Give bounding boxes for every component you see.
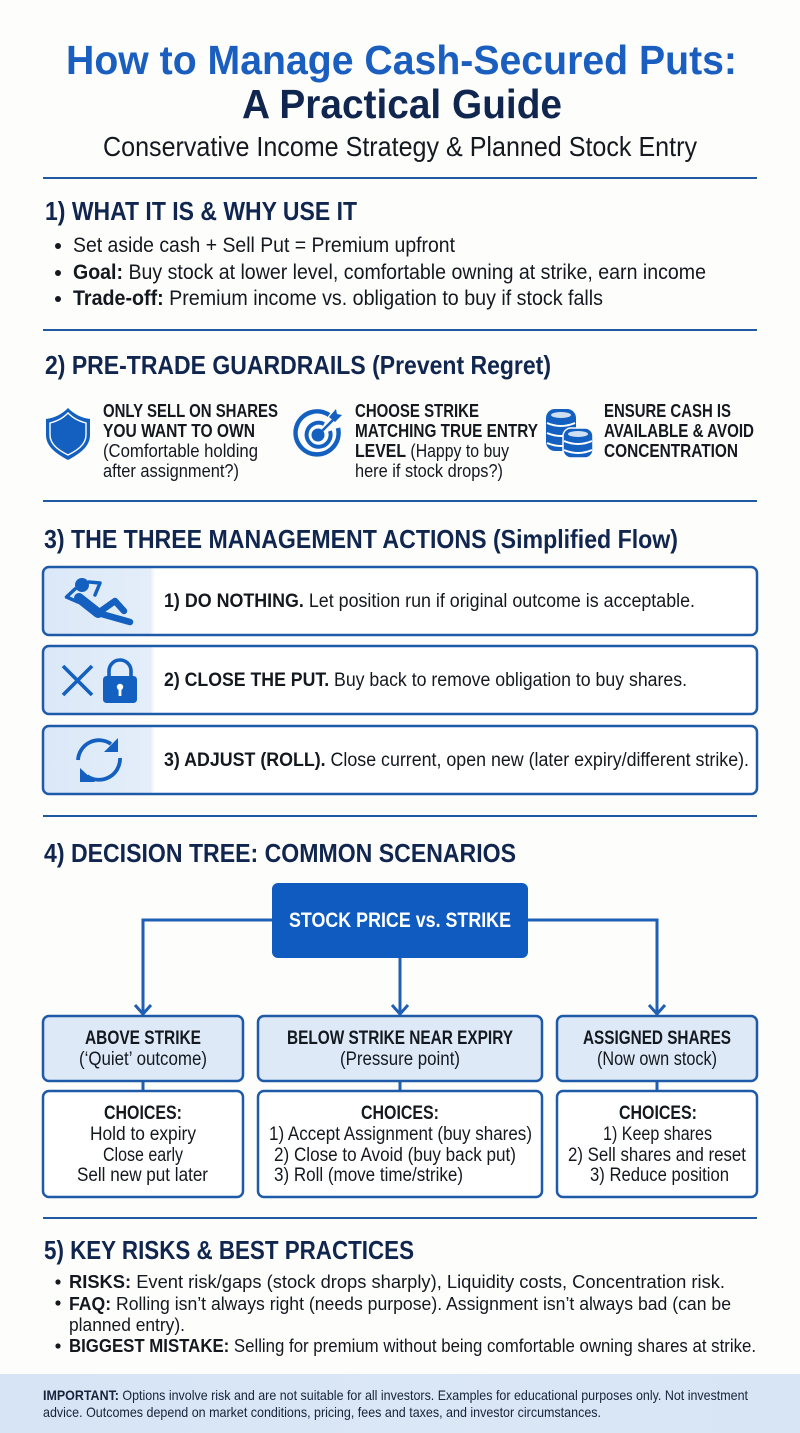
root node: stock price vs strike	[272, 883, 528, 958]
scenario: below strike near expiry: (Pressure point)	[340, 1049, 460, 1070]
panel: section 5 risks	[44, 1235, 756, 1356]
choices: below strike: CHOICES:	[361, 1103, 439, 1124]
guardrail text: cash and concentration	[604, 401, 754, 461]
choices: above strike: CHOICES:	[104, 1103, 182, 1124]
choices: assigned shares	[557, 1091, 757, 1197]
panel: section 1 what it is	[45, 196, 706, 310]
bullet list: section 5: BIGGEST MISTAKE: Selling for premium without being comfortable owning shares at strike.	[69, 1335, 756, 1356]
action text: close the put: 2) CLOSE THE PUT. Buy back to remove obligation to buy shares.	[164, 670, 687, 691]
panel: section 4 decision tree	[43, 838, 757, 1197]
guardrail text: shares you want to own: ONLY SELL ON SHARES	[103, 401, 278, 421]
action text: do nothing: 1) DO NOTHING. Let position run if original outcome is acceptable.	[164, 591, 695, 612]
choices: above strike: Close early	[103, 1145, 183, 1166]
panel: section 3 management actions	[43, 524, 757, 794]
choices: below strike: 2) Close to Avoid (buy back put)	[274, 1145, 516, 1166]
choices: assigned shares: 3) Reduce position	[590, 1165, 729, 1186]
scenario: above strike: (‘Quiet’ outcome)	[79, 1049, 207, 1070]
scenario: below strike near expiry	[258, 1016, 542, 1081]
scenario: assigned shares: (Now own stock)	[597, 1049, 717, 1070]
panel: section 2 guardrails	[45, 350, 754, 481]
heading: section 2: 2) PRE-TRADE GUARDRAILS (Prevent Regret)	[45, 350, 551, 380]
icon: reclining person	[66, 578, 130, 622]
guardrail text: shares you want to own: (Comfortable holding	[103, 441, 258, 461]
scenario: below strike near expiry: BELOW STRIKE NEAR EXPIRY	[287, 1028, 513, 1049]
heading: section 3: 3) THE THREE MANAGEMENT ACTIONS (Simplified Flow)	[44, 524, 678, 554]
bullet list: section 1: Trade-off: Premium income vs. obligation to buy if stock falls	[73, 287, 603, 310]
heading: section 4: 4) DECISION TREE: COMMON SCENARIOS	[44, 838, 516, 868]
guardrail text: cash and concentration: AVAILABLE & AVOID	[604, 421, 754, 441]
bullet list: section 1: Goal: Buy stock at lower level, comfortable owning at strike, earn income	[73, 261, 706, 284]
icon: X and padlock	[63, 660, 137, 703]
choices: above strike	[43, 1091, 243, 1197]
guardrail text: cash and concentration: ENSURE CASH IS	[604, 401, 731, 421]
icon: shield	[46, 408, 90, 460]
choices: above strike: Sell new put later	[77, 1165, 209, 1186]
icon: coin stacks	[546, 409, 593, 458]
icon: target	[296, 409, 342, 454]
scenario: above strike	[43, 1016, 243, 1081]
guardrail text: shares you want to own: YOU WANT TO OWN	[103, 421, 255, 441]
title: A Practical Guide	[242, 81, 562, 127]
choices: assigned shares: 1) Keep shares	[603, 1124, 712, 1145]
guardrail text: matching strike: CHOOSE STRIKE	[355, 401, 479, 421]
choices: assigned shares: CHOICES:	[619, 1103, 697, 1124]
scenario: above strike: ABOVE STRIKE	[85, 1028, 201, 1049]
arrow: to assigned shares	[528, 920, 665, 1014]
action text: adjust roll: 3) ADJUST (ROLL). Close current, open new (later expiry/different strike).	[164, 750, 749, 771]
arrow: to above strike	[135, 920, 272, 1014]
bullet list: section 5: planned entry).	[69, 1314, 185, 1335]
choices: assigned shares: 2) Sell shares and reset	[568, 1145, 747, 1166]
bullet list: section 1: Set aside cash + Sell Put = Premium upfront	[73, 234, 455, 257]
guardrail text: matching strike: LEVEL (Happy to buy	[355, 441, 509, 461]
scenario: assigned shares: ASSIGNED SHARES	[583, 1028, 731, 1049]
subtitle: Conservative Income Strategy & Planned Stock Entry	[103, 131, 697, 162]
guardrail text: matching strike: MATCHING TRUE ENTRY	[355, 421, 538, 441]
scenario: assigned shares	[557, 1016, 757, 1081]
root node: stock price vs strike: STOCK PRICE vs. STRIKE	[289, 909, 511, 932]
bullet list: section 1	[55, 234, 706, 310]
guardrail text: matching strike: here if stock drops?)	[355, 461, 503, 481]
choices: below strike: 3) Roll (move time/strike)	[274, 1165, 463, 1186]
heading: section 5: 5) KEY RISKS & BEST PRACTICES	[44, 1235, 414, 1265]
bullet list: section 5	[55, 1271, 756, 1356]
guardrail text: shares you want to own	[103, 401, 278, 481]
action row: close the put	[43, 646, 757, 714]
guardrail text: matching strike	[355, 401, 538, 481]
icon: roll arrows	[78, 738, 120, 782]
footer disclaimer	[0, 1374, 800, 1433]
choices: below strike: 1) Accept Assignment (buy shares)	[269, 1124, 532, 1145]
footer disclaimer: advice. Outcomes depend on market conditions, pricing, fees and taxes, and investor circumstances.	[43, 1404, 601, 1420]
guardrail text: cash and concentration: CONCENTRATION	[604, 441, 738, 461]
bullet list: section 5: RISKS: Event risk/gaps (stock drops sharply), Liquidity costs, Concentration risk.	[69, 1271, 725, 1292]
choices: above strike: Hold to expiry	[90, 1124, 196, 1145]
arrow: to below strike	[392, 958, 408, 1014]
action row: do nothing	[43, 567, 757, 635]
choices: below strike	[258, 1091, 542, 1197]
title: How to Manage Cash-Secured Puts:	[66, 37, 737, 83]
bullet list: section 5: FAQ: Rolling isn’t always right (needs purpose). Assignment isn’t always bad (can be	[69, 1293, 731, 1314]
heading: section 1: 1) WHAT IT IS & WHY USE IT	[45, 196, 357, 226]
guardrail text: shares you want to own: after assignment?)	[103, 461, 239, 481]
title	[66, 37, 737, 127]
action row: adjust roll	[43, 726, 757, 794]
